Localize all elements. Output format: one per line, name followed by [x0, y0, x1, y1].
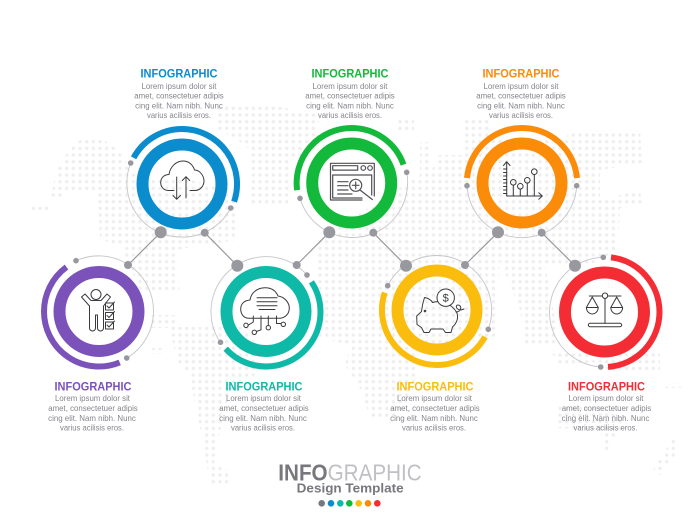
- heading: purple: INFOGRAPHIC: [54, 382, 132, 394]
- text block: purple: varius acilisis eros.: [60, 424, 124, 433]
- text block: purple: amet, consectetuer adipis: [48, 404, 138, 413]
- text block: purple: [48, 394, 138, 433]
- heading: yellow: INFOGRAPHIC: [396, 382, 474, 394]
- panel: purple step: [44, 256, 154, 433]
- text block: blue: amet, consectetuer adipis: [134, 92, 224, 101]
- panel: blue step: [127, 68, 237, 238]
- outer arc: teal: [226, 282, 320, 367]
- footer title: [278, 460, 422, 507]
- panel: orange step: [464, 68, 580, 238]
- text block: teal: amet, consectetuer adipis: [219, 404, 309, 413]
- heading: green: INFOGRAPHIC: [312, 68, 388, 80]
- text block: orange: amet, consectetuer adipis: [476, 92, 566, 101]
- heading: red: INFOGRAPHIC: [568, 382, 645, 394]
- icon: lollipop chart: [504, 162, 542, 199]
- connector lines between circles: [128, 232, 575, 266]
- text block: red: cing elit. Nam nibh. Nunc: [562, 414, 649, 423]
- outer arc: yellow: [382, 293, 485, 365]
- heading: orange: INFOGRAPHIC: [482, 68, 560, 80]
- dotted world map background: [30, 105, 685, 485]
- text block: orange: varius acilisis eros.: [489, 111, 553, 120]
- wordmark: INFOGRAPHIC: INFOGRAPHIC: [278, 460, 422, 486]
- outer arc: green: [297, 128, 404, 190]
- outer arc: orange: [467, 128, 577, 178]
- ring: yellow: [398, 270, 476, 350]
- thin orbit with nodes: red: [549, 254, 606, 370]
- thin orbit with nodes: blue: [127, 160, 234, 238]
- text block: orange: Lorem ipsum dolor sit: [484, 82, 559, 91]
- text block: green: cing elit. Nam nibh. Nunc: [306, 101, 394, 110]
- ring: red: [565, 272, 644, 352]
- icon: balance scales: [586, 293, 623, 327]
- colour dots row: [318, 500, 381, 507]
- ring: green: [312, 144, 391, 222]
- panel: teal step: [211, 257, 320, 433]
- text block: green: Lorem ipsum dolor sit: [312, 82, 388, 91]
- panel: green step: [297, 68, 410, 238]
- text block: blue: varius acilisis eros.: [147, 111, 211, 120]
- text block: green: [305, 82, 395, 120]
- icon: piggy bank with coin: [417, 289, 464, 332]
- text block: red: amet, consectetuer adipis: [562, 404, 651, 413]
- text block: purple: cing elit. Nam nibh. Nunc: [48, 414, 136, 423]
- text block: orange: cing elit. Nam nibh. Nunc: [477, 101, 565, 110]
- thin orbit with nodes: green: [297, 170, 410, 238]
- text block: yellow: varius acilisis eros.: [402, 424, 466, 433]
- outer arc: blue: [134, 129, 237, 202]
- thin orbit with nodes: teal: [211, 257, 310, 345]
- text block: teal: Lorem ipsum dolor sit: [226, 394, 302, 403]
- heading: teal: INFOGRAPHIC: [226, 382, 302, 394]
- text block: purple: Lorem ipsum dolor sit: [55, 394, 131, 403]
- text block: yellow: cing elit. Nam nibh. Nunc: [390, 414, 478, 423]
- icon: cloud upload and download: [161, 161, 204, 199]
- text block: teal: varius acilisis eros.: [231, 424, 295, 433]
- outer arc: red: [608, 257, 660, 367]
- text block: blue: [134, 82, 224, 120]
- outer arc: purple: [44, 267, 120, 367]
- text block: orange: [476, 82, 566, 120]
- text block: yellow: amet, consectetuer adipis: [390, 404, 480, 413]
- icon: cloud network: [241, 288, 289, 334]
- subtitle: Design Template: [297, 482, 404, 496]
- icon: person with checklist: [82, 290, 114, 331]
- text block: green: amet, consectetuer adipis: [305, 92, 395, 101]
- ring: orange: [482, 144, 562, 222]
- text block: green: varius acilisis eros.: [318, 111, 382, 120]
- ring: purple: [60, 272, 138, 351]
- icon: piggy bank with coin: $: [443, 292, 449, 304]
- text block: red: varius acilisis eros.: [574, 424, 638, 433]
- thin orbit with nodes: orange: [464, 183, 580, 238]
- thin orbit with nodes: purple: [73, 256, 154, 361]
- text block: teal: [219, 394, 309, 433]
- text block: teal: cing elit. Nam nibh. Nunc: [219, 414, 307, 423]
- heading: blue: INFOGRAPHIC: [140, 68, 218, 80]
- panel: yellow step: [382, 255, 492, 433]
- text block: yellow: [390, 394, 480, 433]
- panel: red step: [549, 254, 660, 433]
- thin orbit with nodes: yellow: [385, 255, 492, 332]
- ring: blue: [142, 144, 222, 224]
- text block: red: Lorem ipsum dolor sit: [568, 394, 644, 403]
- ring: teal: [226, 272, 306, 351]
- text block: blue: Lorem ipsum dolor sit: [142, 82, 217, 91]
- icon: browser window with magnifier: [330, 163, 374, 200]
- text block: yellow: Lorem ipsum dolor sit: [397, 394, 473, 403]
- text block: blue: cing elit. Nam nibh. Nunc: [135, 101, 223, 110]
- text block: red: [562, 394, 651, 433]
